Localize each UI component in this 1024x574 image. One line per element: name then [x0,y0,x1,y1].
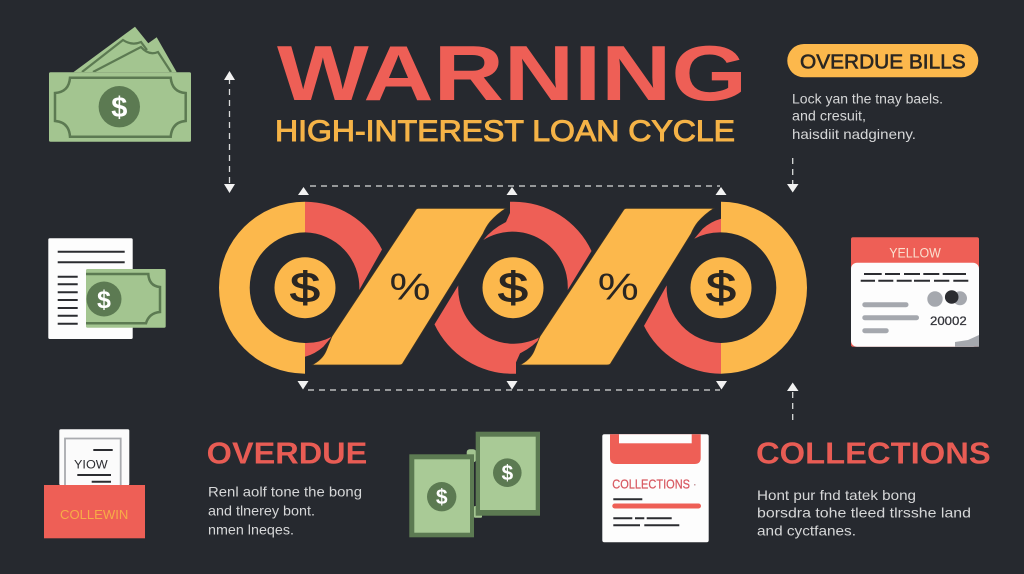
badge: overdue bills: OVERDUE BILLS [800,51,966,73]
text block: overdue bills description: Lock yan the tnay baels. [792,90,943,106]
percent band: left [312,208,506,365]
icon: folder with paper: COLLEWIN [60,508,128,522]
icon: yellow card: 20002 [930,316,967,328]
text block: overdue bills description: haisdiit nadgineny. [792,126,916,142]
ring: left [219,202,382,374]
icon: two banknotes [409,432,540,537]
text block: overdue description: and tlnerey bont. [208,503,315,519]
subtitle: high-interest loan cycle: HIGH-INTEREST LOAN CYCLE [275,115,735,148]
ring: middle [434,202,592,374]
icon: yellow card [851,237,979,347]
icon: yellow card: YELLOW [889,245,941,260]
icon: two banknotes: $ [436,486,448,509]
arrows: dashed loop frame [298,186,727,390]
icon: folder with paper [44,429,145,538]
percent band: left: % [390,266,430,308]
ring: right [644,202,807,374]
coin: middle: $ [498,264,528,312]
text block: overdue bills description: and cresuit, [792,108,866,124]
arrow: right lower up [787,382,798,424]
badge: overdue bills [787,44,978,77]
heading: collections: COLLECTIONS [756,435,991,470]
text block: overdue bills description [792,90,943,142]
heading: overdue: OVERDUE [207,435,367,470]
text block: collections description: borsdra tohe tleed tlrsshe land [757,505,971,521]
title: WARNING: WARNING [277,29,747,117]
loop: interest cycle rings and percent bands [219,202,807,374]
text block: collections description [757,487,971,539]
coin: left [274,257,336,318]
text block: collections description: and cyctfanes. [757,523,856,539]
icon: stacked banknotes [49,27,191,142]
percent band: right: % [598,266,639,308]
icon: document with banknote [48,238,166,339]
text block: overdue description: Renl aolf tone the bong [208,484,362,500]
icon: two banknotes: $ [501,462,513,485]
coin: middle [482,257,544,318]
percent band: right [520,208,714,365]
arrow: right upper down [787,158,798,192]
icon: document with banknote: $ [97,286,111,314]
arrow: left vertical double-headed [224,71,235,193]
text block: collections description: Hont pur fnd tatek bong [757,487,916,503]
text block: overdue description: nmen lneqes. [208,521,294,537]
coin: left: $ [290,264,320,312]
coin: right: $ [706,264,736,312]
icon: folder with paper: YIOW [74,459,108,471]
text block: overdue description [208,484,362,537]
icon: stacked banknotes: $ [111,92,127,124]
icon: collections notice [602,434,709,542]
icon: collections notice: COLLECTIONS [612,477,690,491]
coin: right [690,257,752,318]
